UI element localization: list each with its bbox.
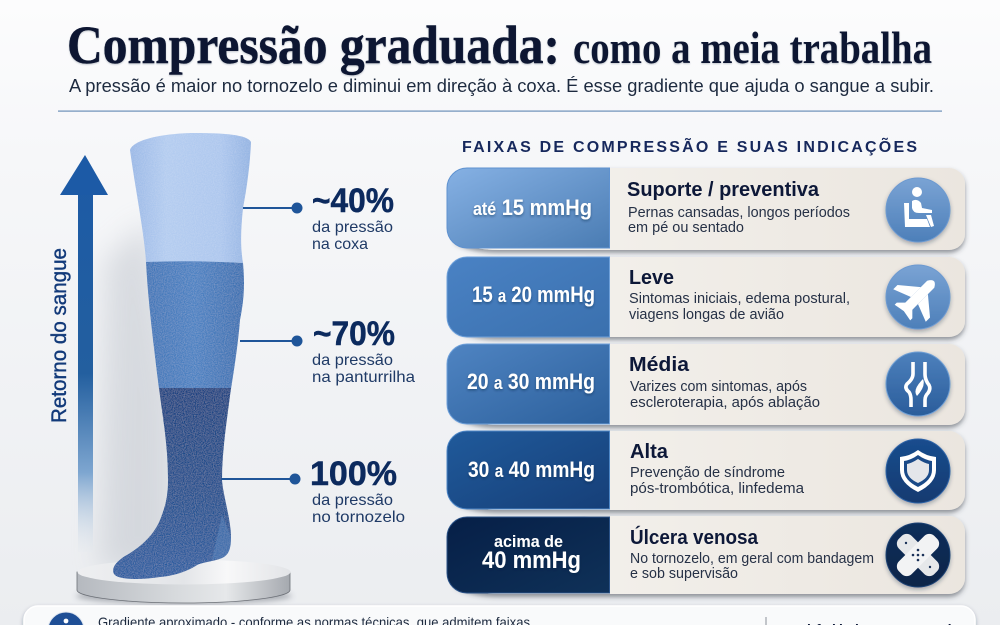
icon: crossed bandages [886, 523, 950, 587]
platform [76, 560, 292, 604]
callout: ankle: 100% [310, 455, 397, 493]
row: up to 15 mmHg: Suporte / preventiva [627, 179, 820, 201]
callout: thigh: ~40% [312, 182, 394, 220]
callout: thigh: da pressão [312, 219, 393, 236]
callout: calf: da pressão [312, 352, 393, 369]
row: 15 to 20 mmHg [447, 257, 965, 337]
footer note bar [24, 606, 975, 625]
footer right text (clipped at the page edge) [807, 621, 952, 625]
callout: thigh [243, 182, 394, 253]
row: 30 to 40 mmHg: 30 a 40 mmHg [468, 457, 595, 482]
row: up to 15 mmHg: até 15 mmHg [473, 195, 592, 220]
compression sock [113, 133, 251, 579]
title: Compressão graduada: [67, 15, 560, 75]
row: 20 to 30 mmHg: 20 a 30 mmHg [467, 369, 595, 394]
icon: airplane [886, 265, 950, 329]
icon: shield [886, 439, 950, 503]
callout: thigh: na coxa [312, 236, 368, 253]
row: 20 to 30 mmHg: Varizes com sintomas, após [630, 379, 807, 395]
row: 30 to 40 mmHg: pós-trombótica, linfedema [630, 481, 805, 497]
row: above 40 mmHg: No tornozelo, em geral com bandagem [630, 551, 874, 567]
arrow label: Retorno do sangue [48, 248, 71, 423]
subtitle: A pressão é maior no tornozelo e diminui em direção à coxa. É esse gradiente que ajuda o sangue a subir. [69, 75, 934, 96]
section heading: FAIXAS DE COMPRESSÃO E SUAS INDICAÇÕES [462, 136, 917, 156]
row: 30 to 40 mmHg [447, 431, 965, 510]
row: up to 15 mmHg [447, 168, 965, 250]
callout: ankle [221, 455, 405, 526]
callout: ankle: da pressão [312, 492, 393, 509]
callout: calf: na panturrilha [312, 369, 415, 386]
row: above 40 mmHg: 40 mmHg [482, 547, 581, 574]
row: above 40 mmHg [447, 516, 965, 594]
sock calf section [146, 261, 244, 389]
row: 20 to 30 mmHg: escleroterapia, após ablação [630, 395, 820, 411]
row: 30 to 40 mmHg: Alta [630, 441, 669, 463]
sock ankle and foot section [113, 388, 231, 579]
row: 15 to 20 mmHg: Sintomas iniciais, edema postural, [629, 291, 850, 307]
callout: calf [240, 315, 415, 386]
row: 20 to 30 mmHg: Média [629, 354, 690, 376]
title: como a meia trabalha [573, 22, 932, 73]
arrow: blood return [60, 155, 108, 552]
row: 15 to 20 mmHg: Leve [629, 267, 674, 289]
icon: veins [886, 352, 950, 416]
row: above 40 mmHg: Úlcera venosa [630, 525, 759, 549]
row: above 40 mmHg: e sob supervisão [630, 566, 738, 582]
icon: seated person [886, 178, 950, 242]
row: 15 to 20 mmHg: viagens longas de avião [629, 307, 784, 323]
row: 15 to 20 mmHg: 15 a 20 mmHg [472, 282, 595, 307]
row: 30 to 40 mmHg: Prevenção de síndrome [630, 465, 785, 481]
row: above 40 mmHg: acima de [494, 532, 563, 551]
row: up to 15 mmHg: Pernas cansadas, longos períodos [628, 205, 850, 221]
callout: calf: ~70% [313, 315, 395, 353]
sock thigh section [130, 133, 251, 263]
callout: ankle: no tornozelo [312, 509, 405, 526]
title [67, 15, 932, 75]
row: 20 to 30 mmHg [447, 344, 965, 425]
icon: info [48, 612, 84, 625]
row: up to 15 mmHg: em pé ou sentado [628, 220, 744, 236]
